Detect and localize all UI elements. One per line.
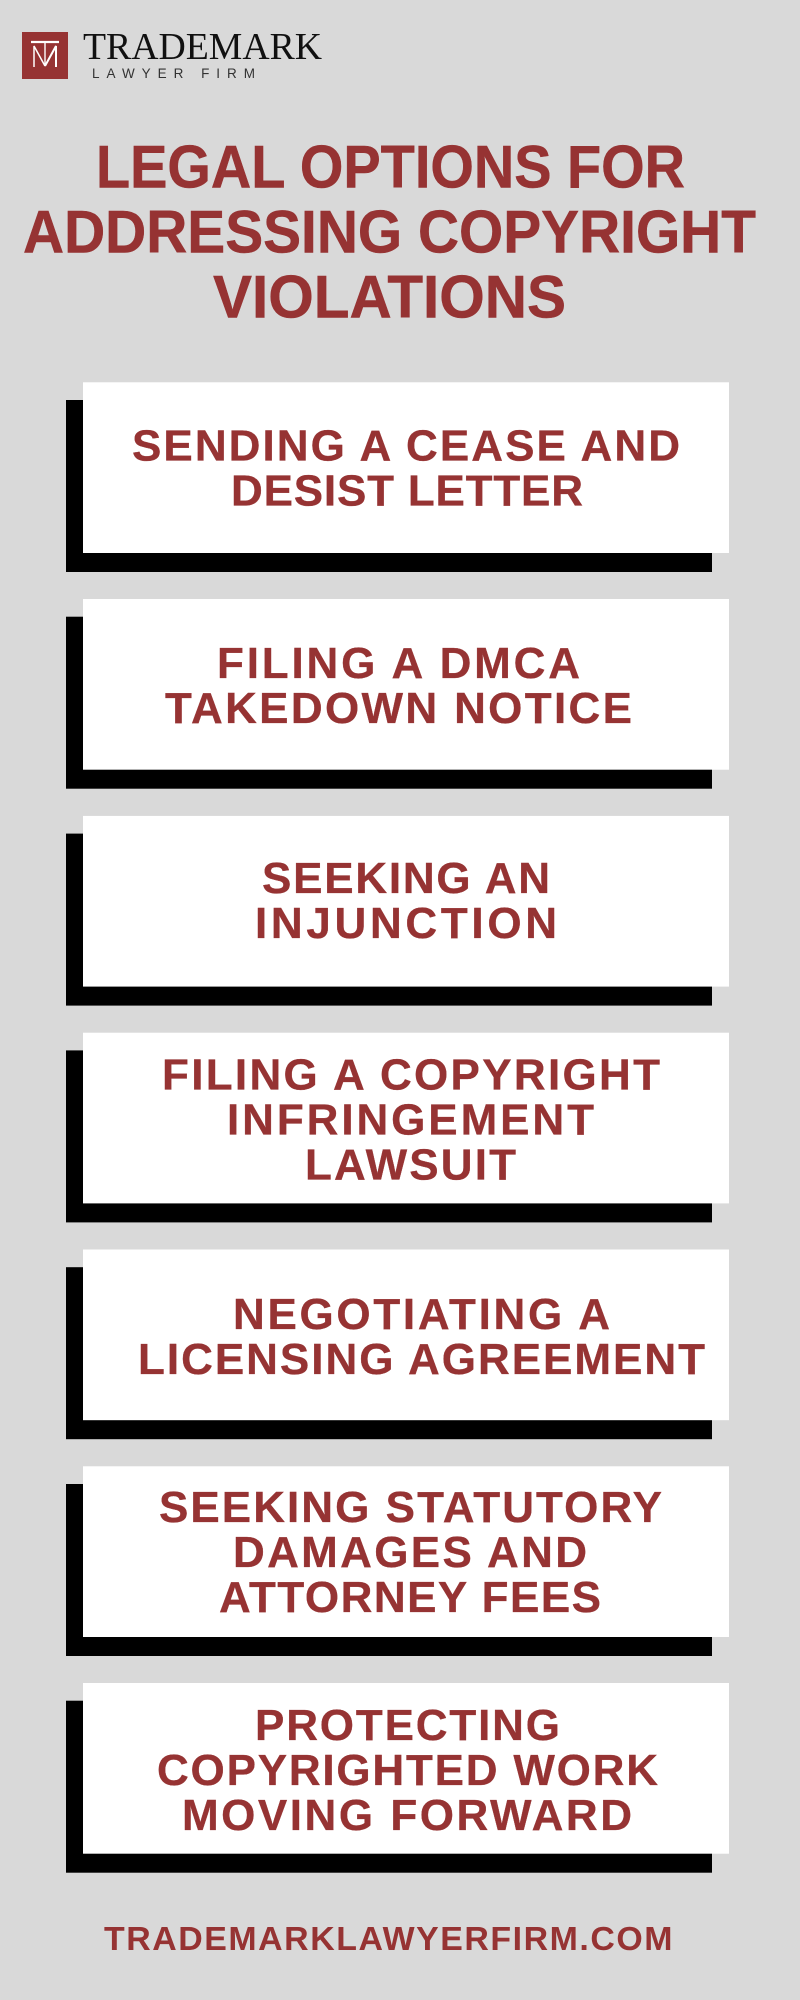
label: licensing agreement: NEGOTIATING A bbox=[233, 1290, 610, 1339]
footer url: TRADEMARKLAWYERFIRM.COM bbox=[104, 1920, 674, 1957]
label: statutory damages: ATTORNEY FEES bbox=[219, 1573, 601, 1622]
panel: cease and desist bbox=[66, 382, 729, 572]
label: cease and desist: SENDING A CEASE AND bbox=[132, 422, 680, 470]
label: protecting work: PROTECTING bbox=[255, 1701, 560, 1750]
panel: licensing agreement bbox=[66, 1250, 729, 1439]
title: VIOLATIONS bbox=[213, 264, 566, 330]
label: statutory damages: SEEKING STATUTORY bbox=[159, 1483, 662, 1532]
logo bbox=[22, 26, 323, 81]
label: licensing agreement bbox=[138, 1290, 705, 1384]
label: DMCA takedown bbox=[165, 639, 632, 733]
icon: TM monogram bbox=[22, 32, 68, 79]
label: injunction: SEEKING AN bbox=[262, 854, 550, 903]
label: cease and desist: DESIST LETTER bbox=[231, 466, 583, 516]
label: injunction: INJUNCTION bbox=[255, 899, 557, 948]
title: LEGAL OPTIONS FOR bbox=[96, 134, 685, 200]
panel: injunction bbox=[66, 816, 729, 1006]
label: DMCA takedown: FILING A DMCA bbox=[217, 639, 580, 688]
label: cease and desist bbox=[132, 422, 680, 516]
logo wordmark: TRADEMARK bbox=[83, 26, 323, 68]
title bbox=[23, 134, 756, 330]
panel: DMCA takedown bbox=[66, 599, 729, 789]
label: protecting work bbox=[157, 1701, 658, 1840]
label: infringement lawsuit: FILING A COPYRIGHT bbox=[162, 1050, 660, 1100]
label: DMCA takedown: TAKEDOWN NOTICE bbox=[165, 684, 632, 733]
logo tagline: LAWYER FIRM bbox=[92, 66, 255, 81]
label: protecting work: COPYRIGHTED WORK bbox=[157, 1746, 658, 1795]
label: infringement lawsuit bbox=[162, 1050, 660, 1190]
title: ADDRESSING COPYRIGHT bbox=[23, 198, 756, 266]
label: licensing agreement: LICENSING AGREEMENT bbox=[138, 1335, 705, 1384]
panel: statutory damages bbox=[66, 1466, 729, 1656]
label: infringement lawsuit: LAWSUIT bbox=[305, 1140, 516, 1190]
label: infringement lawsuit: INFRINGEMENT bbox=[227, 1096, 594, 1144]
label: statutory damages: DAMAGES AND bbox=[233, 1528, 587, 1577]
label: protecting work: MOVING FORWARD bbox=[182, 1791, 632, 1840]
label: injunction bbox=[255, 854, 557, 948]
panel: infringement lawsuit bbox=[66, 1033, 729, 1222]
panel: protecting work bbox=[66, 1683, 729, 1873]
label: statutory damages bbox=[159, 1483, 662, 1622]
